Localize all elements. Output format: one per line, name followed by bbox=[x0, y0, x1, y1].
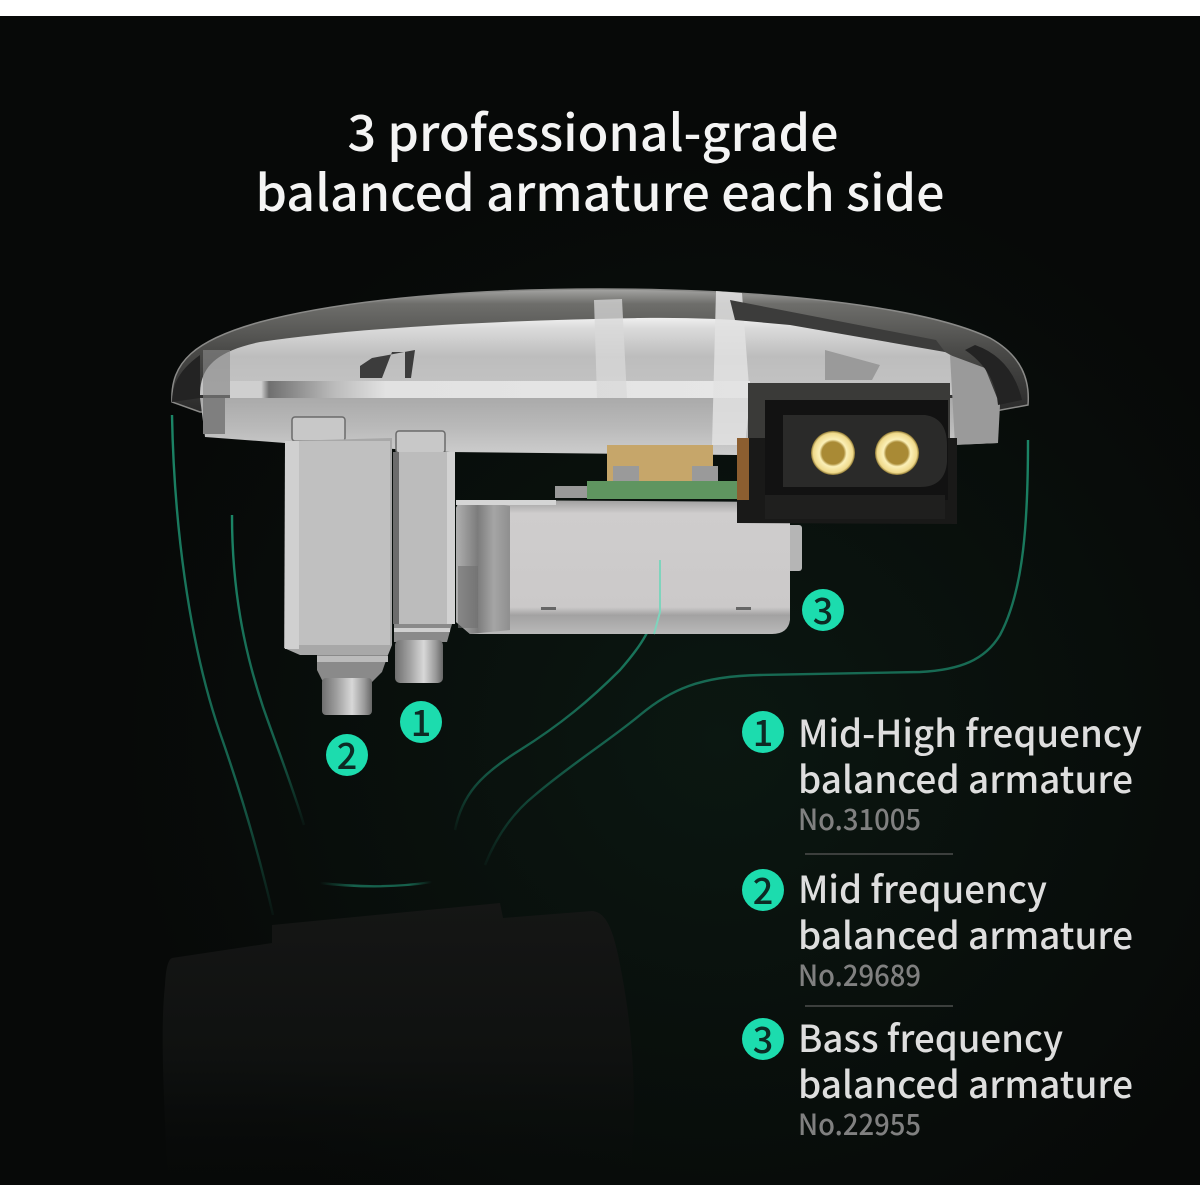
callout badge 3 on driver bbox=[802, 583, 844, 635]
inner body upper face bbox=[200, 318, 978, 395]
legend item 3 bbox=[742, 1009, 1133, 1144]
balanced armature 1: mid-high bbox=[393, 431, 455, 683]
green contour lines of the earphone bbox=[172, 415, 1028, 915]
legend item 2: 2 bbox=[753, 863, 773, 915]
legend item 1: balanced armature bbox=[798, 750, 1133, 804]
legend item 2: balanced armature bbox=[798, 906, 1133, 960]
divider bbox=[805, 1005, 953, 1007]
legend item 3: No.22955 bbox=[798, 1102, 921, 1144]
title bbox=[256, 94, 944, 226]
bright band bbox=[230, 381, 750, 398]
callout badge 3 on driver: 3 bbox=[813, 583, 833, 635]
pins bbox=[811, 431, 855, 475]
shell cap bbox=[172, 289, 1028, 455]
circuit board and gold post bbox=[555, 445, 737, 499]
earphone housing silhouette bbox=[163, 903, 634, 1185]
legend item 1: 1 bbox=[753, 705, 773, 757]
legend item 1 bbox=[742, 704, 1142, 839]
balanced armature 2: mid bbox=[284, 417, 392, 715]
title: balanced armature each side bbox=[256, 154, 944, 226]
two-pin connector bbox=[737, 383, 957, 524]
title: 3 professional-grade bbox=[348, 94, 838, 166]
legend item 3: Bass frequency bbox=[798, 1009, 1063, 1063]
inner body lower face bbox=[200, 398, 998, 455]
legend item 1: No.31005 bbox=[798, 797, 921, 839]
clear strap details bbox=[594, 299, 627, 398]
legend item 2: No.29689 bbox=[798, 953, 921, 995]
legend item 1: Mid-High frequency bbox=[798, 704, 1142, 758]
callout badge 1 on driver: 1 bbox=[411, 695, 431, 747]
callout badge 1 on driver bbox=[400, 695, 442, 747]
legend item 3: 3 bbox=[753, 1012, 773, 1064]
legend item 2 bbox=[742, 860, 1133, 995]
callout badge 2 on driver bbox=[326, 728, 368, 780]
clear dome bbox=[172, 289, 1028, 412]
divider bbox=[805, 853, 953, 855]
callout badge 2 on driver: 2 bbox=[337, 728, 357, 780]
green line passing over the bass driver bbox=[654, 560, 660, 634]
legend item 3: balanced armature bbox=[798, 1055, 1133, 1109]
legend item 2: Mid frequency bbox=[798, 860, 1047, 914]
balanced armature 3: bass bbox=[456, 500, 802, 634]
